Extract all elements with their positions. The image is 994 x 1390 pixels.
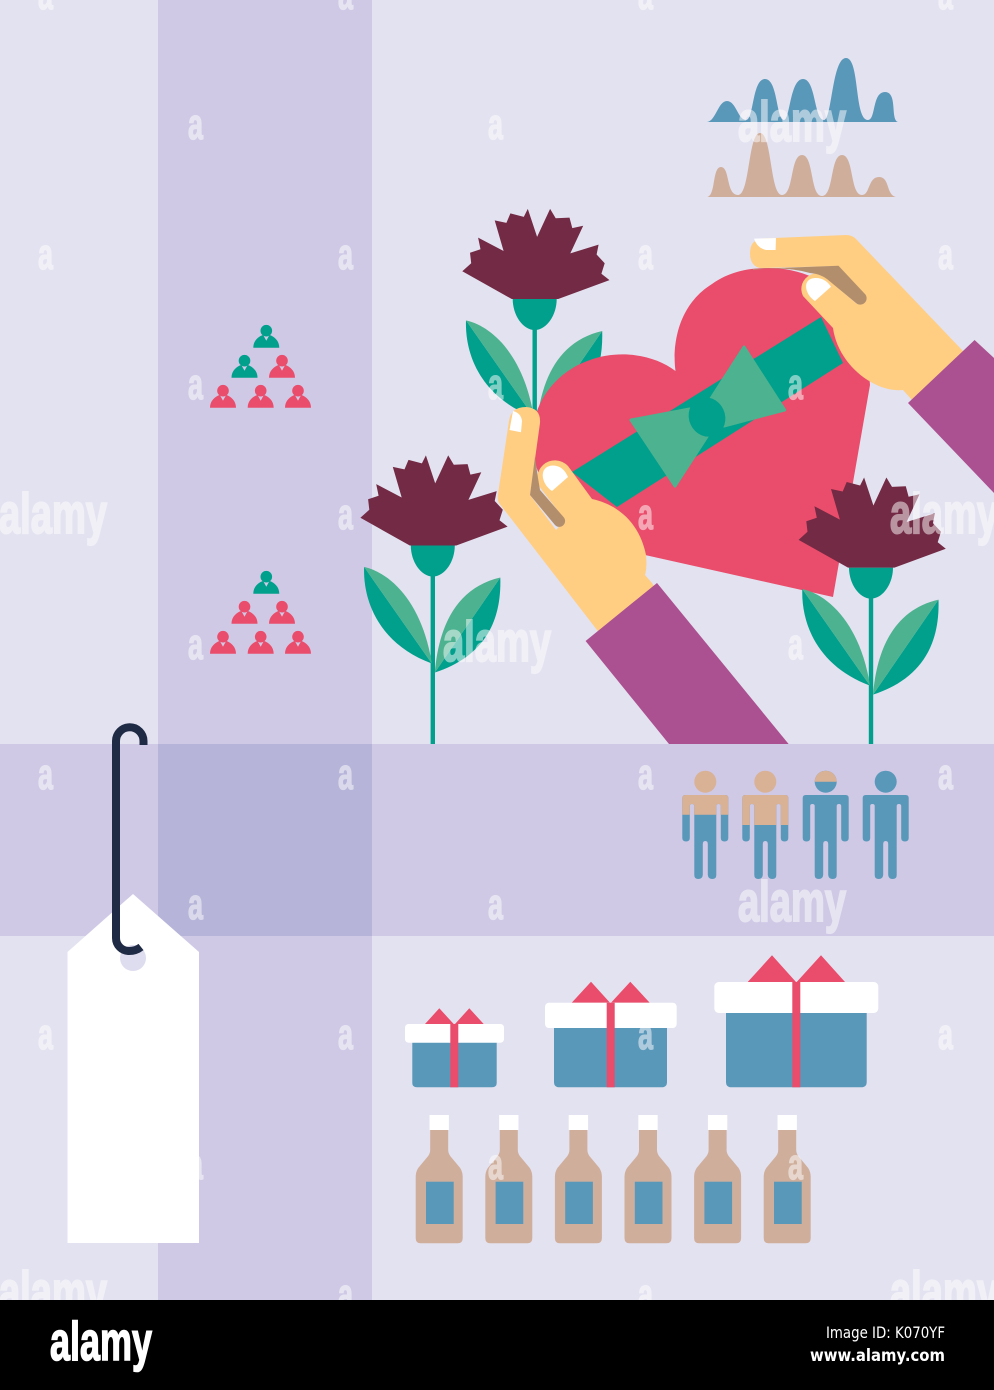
watermark layer: alamy	[738, 90, 846, 154]
person 2	[742, 771, 788, 879]
watermark layer: a	[338, 750, 353, 799]
flower: top, behind heart	[462, 209, 610, 426]
watermark layer: alamy	[0, 482, 107, 546]
image id: Image ID: K070YF	[826, 1323, 945, 1342]
watermark layer: a	[638, 1270, 653, 1319]
watermark layer: a	[188, 620, 203, 669]
bottles row	[416, 1115, 811, 1243]
watermark layer: a	[938, 1010, 953, 1059]
vertical band	[158, 0, 372, 1300]
chart: blue distribution	[707, 58, 898, 122]
left hand	[498, 407, 662, 650]
watermark layer: a	[638, 1010, 653, 1059]
watermark layer: alamy	[0, 1260, 107, 1324]
medium gift	[545, 982, 677, 1087]
watermark layer: a	[338, 1270, 353, 1319]
bow	[631, 347, 785, 486]
person 1	[682, 771, 728, 879]
horizontal band	[0, 744, 994, 936]
watermark layer: a	[488, 880, 503, 929]
watermark layer: a	[638, 750, 653, 799]
person 4	[863, 771, 909, 879]
chart: tan distribution	[707, 133, 896, 197]
website: www.alamy.com	[810, 1346, 945, 1365]
watermark layer: a	[788, 1140, 803, 1189]
ribbon	[572, 317, 843, 507]
watermark layer: a	[938, 230, 953, 279]
footer logo: alamy	[50, 1310, 152, 1372]
bottle 1	[416, 1115, 463, 1243]
bottle 5	[694, 1115, 741, 1243]
flower: right, in front of heart	[799, 477, 946, 744]
left sleeve	[586, 583, 789, 744]
watermark layer: a	[338, 230, 353, 279]
large gift	[714, 955, 878, 1087]
watermark layer: alamy	[443, 610, 551, 674]
bottle 6	[764, 1115, 811, 1243]
watermark layer: a	[188, 100, 203, 149]
people pyramid: lower	[210, 571, 311, 654]
right sleeve	[908, 340, 994, 493]
flower: left	[360, 455, 508, 744]
watermark layer: a	[188, 880, 203, 929]
people row	[682, 771, 909, 879]
people pyramid: upper	[210, 325, 311, 408]
small gift	[405, 1008, 504, 1087]
watermark layer: a	[788, 360, 803, 409]
watermark layer: a	[638, 490, 653, 539]
watermark layer: a	[938, 750, 953, 799]
right hand	[750, 235, 975, 410]
watermark layer: a	[488, 360, 503, 409]
watermark layer: a	[38, 750, 53, 799]
watermark layer: a	[488, 1140, 503, 1189]
footer bar	[0, 1300, 994, 1390]
watermark layer: a	[488, 100, 503, 149]
watermark layer: a	[638, 230, 653, 279]
watermark layer: a	[188, 1140, 203, 1189]
person 3	[803, 771, 849, 879]
watermark layer: a	[188, 360, 203, 409]
watermark layer: alamy	[738, 870, 846, 934]
watermark layer: a	[38, 230, 53, 279]
bottle 4	[624, 1115, 672, 1243]
price tag	[68, 727, 199, 1243]
watermark layer: a	[788, 620, 803, 669]
bottle 3	[555, 1115, 602, 1243]
watermark layer: a	[338, 490, 353, 539]
watermark layer: a	[38, 1010, 53, 1059]
heart gift box	[532, 268, 870, 597]
hook	[116, 727, 144, 951]
bottle 2	[485, 1115, 532, 1243]
watermark layer: a	[338, 1010, 353, 1059]
band overlap	[158, 744, 372, 936]
